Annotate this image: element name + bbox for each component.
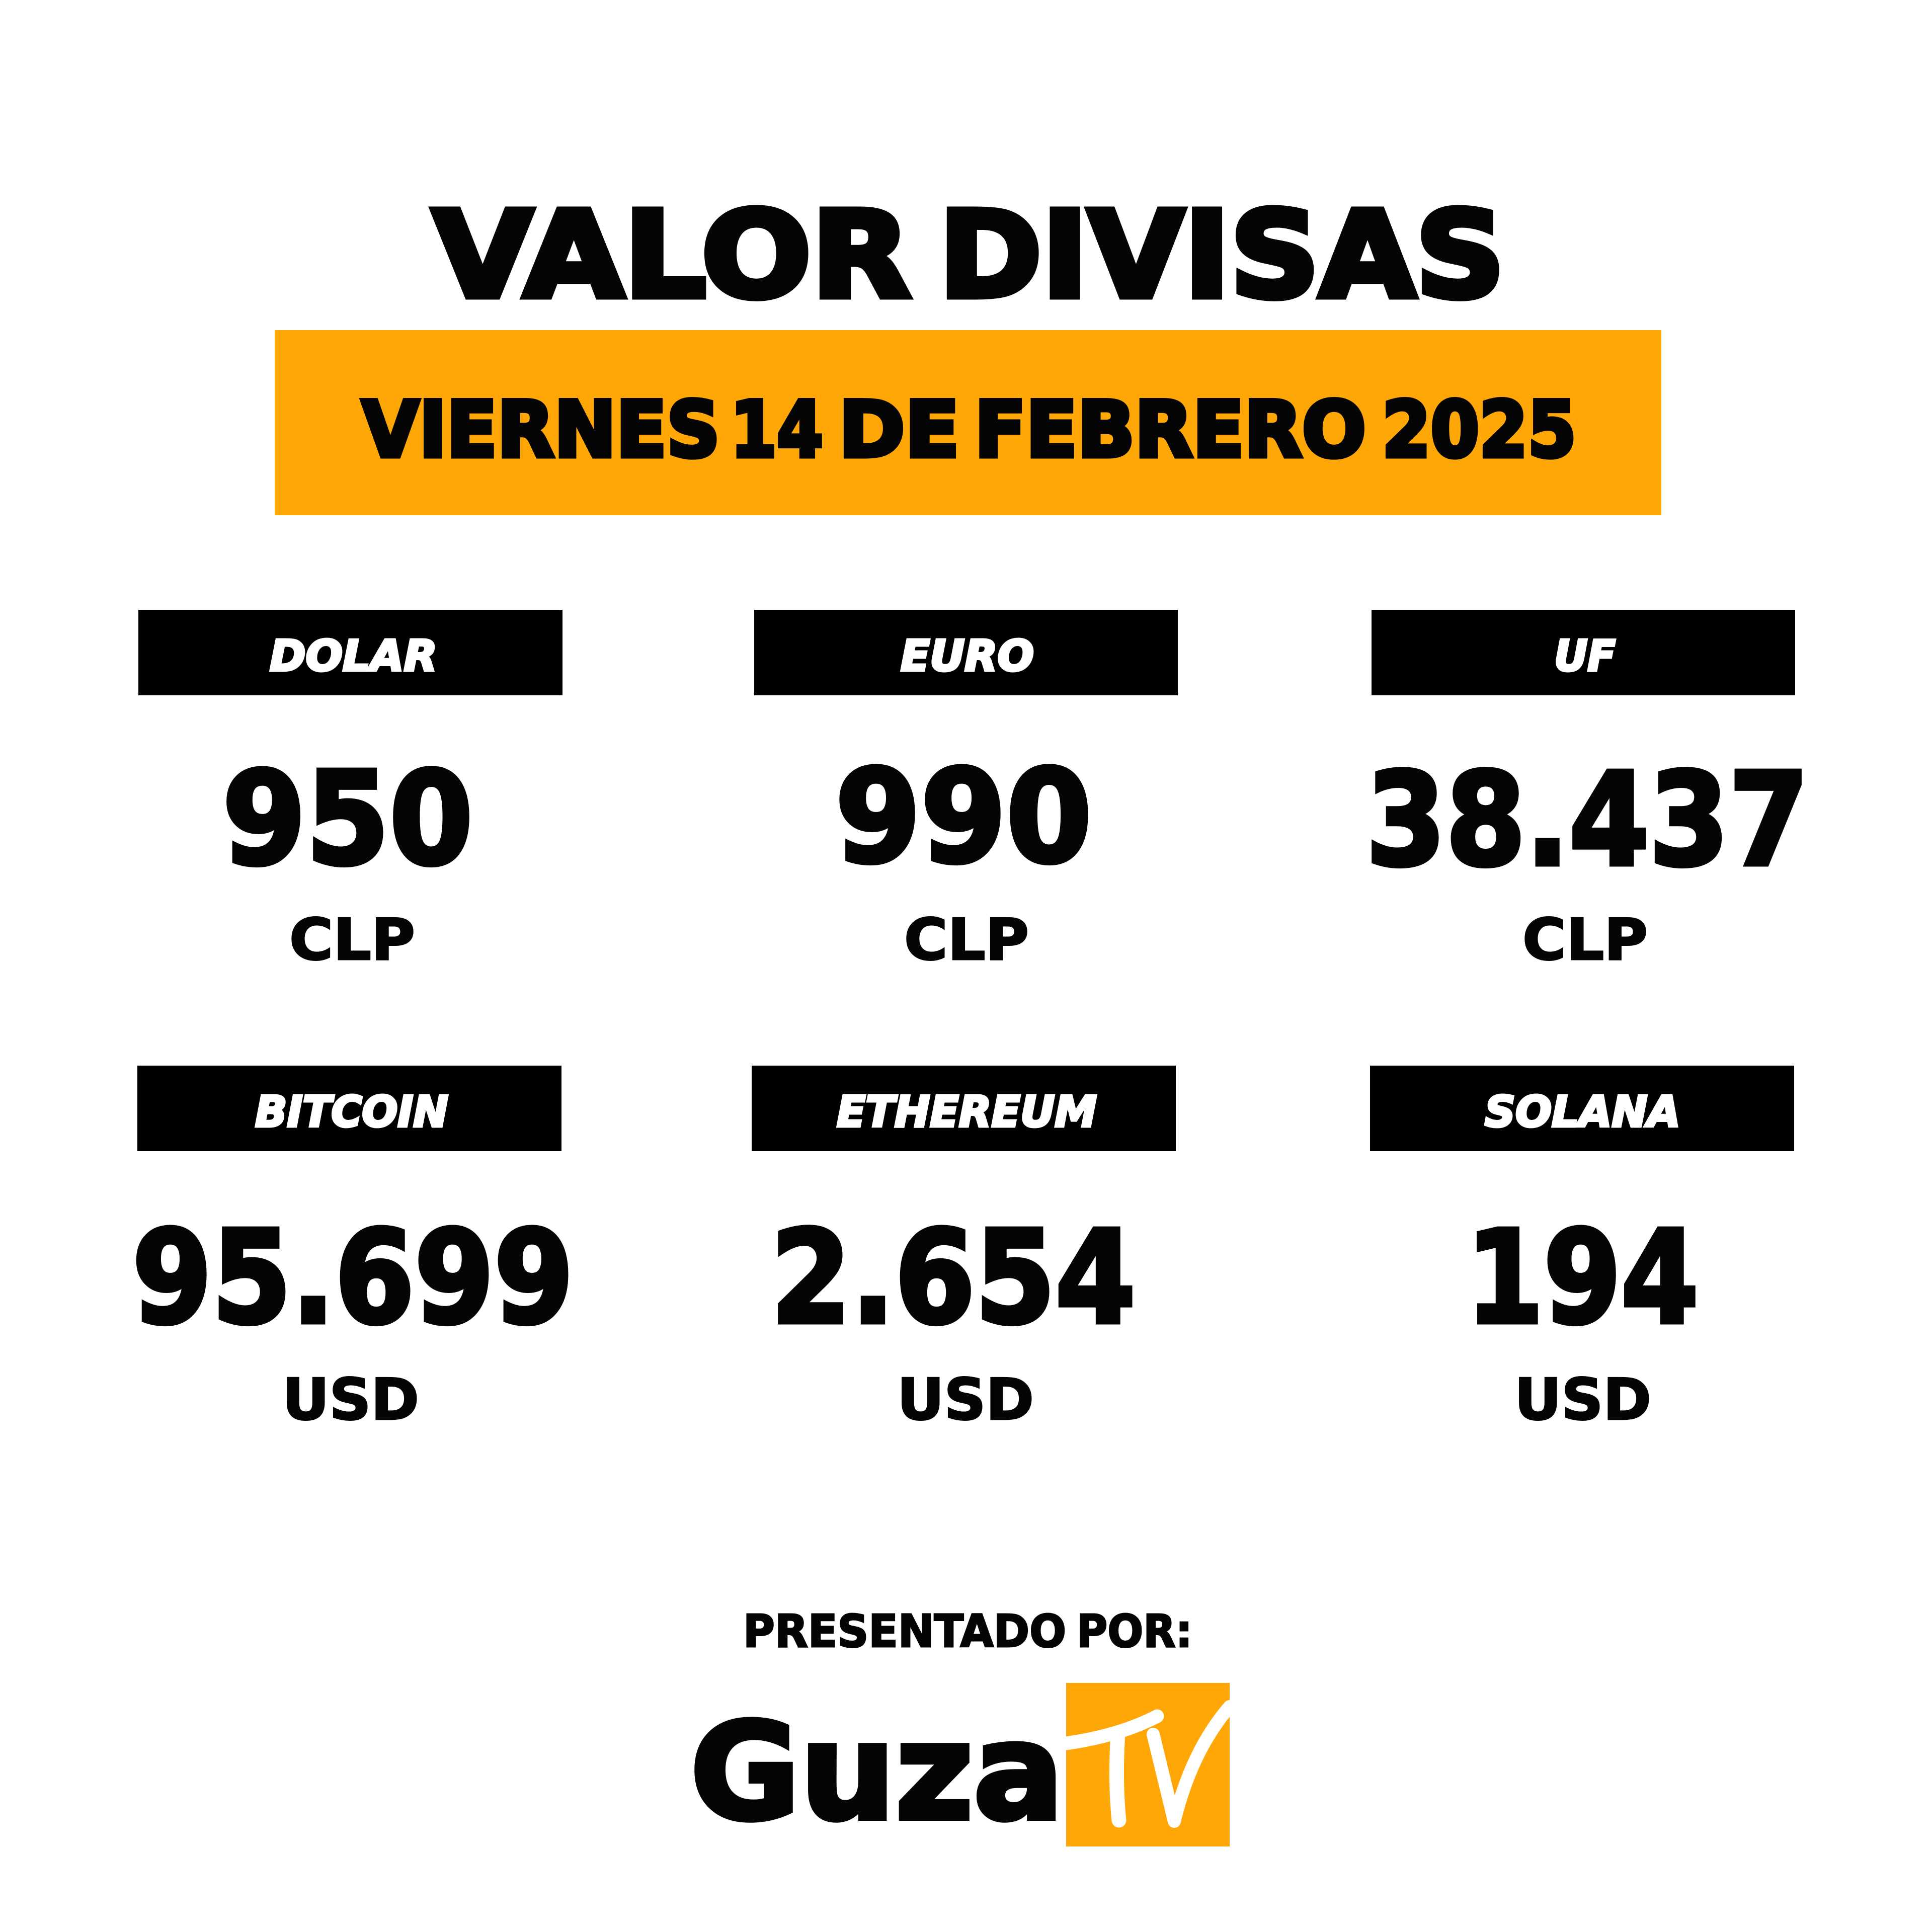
- panel: uf: 38.437: [1366, 746, 1809, 895]
- date banner: [275, 330, 1661, 515]
- panel: dolar: DOLAR: [270, 631, 437, 681]
- sponsor heading: POR:: [1077, 1605, 1192, 1657]
- panel: dolar: [138, 610, 562, 973]
- date banner: 2025: [1382, 385, 1576, 475]
- panel: euro: [754, 610, 1178, 973]
- panel: ethereum: ETHEREUM: [837, 1087, 1097, 1137]
- panel: bitcoin: BITCOIN: [255, 1087, 448, 1137]
- date banner: VIERNES: [362, 385, 720, 475]
- panel: uf: UF: [1554, 631, 1616, 681]
- panel: solana: SOLANA: [1485, 1087, 1680, 1137]
- date banner: FEBRERO: [975, 385, 1366, 475]
- panel: euro: EURO: [901, 631, 1034, 681]
- panel: euro: 990: [835, 743, 1092, 892]
- panel: dolar: 950: [222, 745, 473, 894]
- panel: ethereum: USD: [897, 1366, 1034, 1433]
- panel: bitcoin: [132, 1066, 574, 1433]
- panel: dolar: CLP: [289, 907, 415, 973]
- sponsor heading: PRESENTADO: [743, 1605, 1066, 1657]
- date banner: DE: [839, 385, 959, 475]
- panel: solana: [1370, 1066, 1794, 1433]
- logo: GuzaTV: [690, 1683, 1230, 1850]
- title: VALOR: [433, 186, 911, 325]
- title: DIVISAS: [939, 186, 1505, 325]
- panel: uf: CLP: [1522, 907, 1648, 973]
- panel: solana: USD: [1514, 1366, 1651, 1433]
- panel: uf: [1366, 610, 1809, 973]
- panel: bitcoin: 95.699: [132, 1203, 574, 1353]
- title: [433, 186, 1505, 325]
- panel: solana: 194: [1466, 1203, 1699, 1353]
- panel: ethereum: 2.654: [771, 1203, 1136, 1353]
- panel: bitcoin: USD: [282, 1366, 419, 1433]
- logo: GuzaTV: Guza: [690, 1695, 1064, 1850]
- panel: euro: CLP: [904, 907, 1029, 973]
- date banner: 14: [731, 385, 823, 475]
- panel: ethereum: [752, 1066, 1176, 1433]
